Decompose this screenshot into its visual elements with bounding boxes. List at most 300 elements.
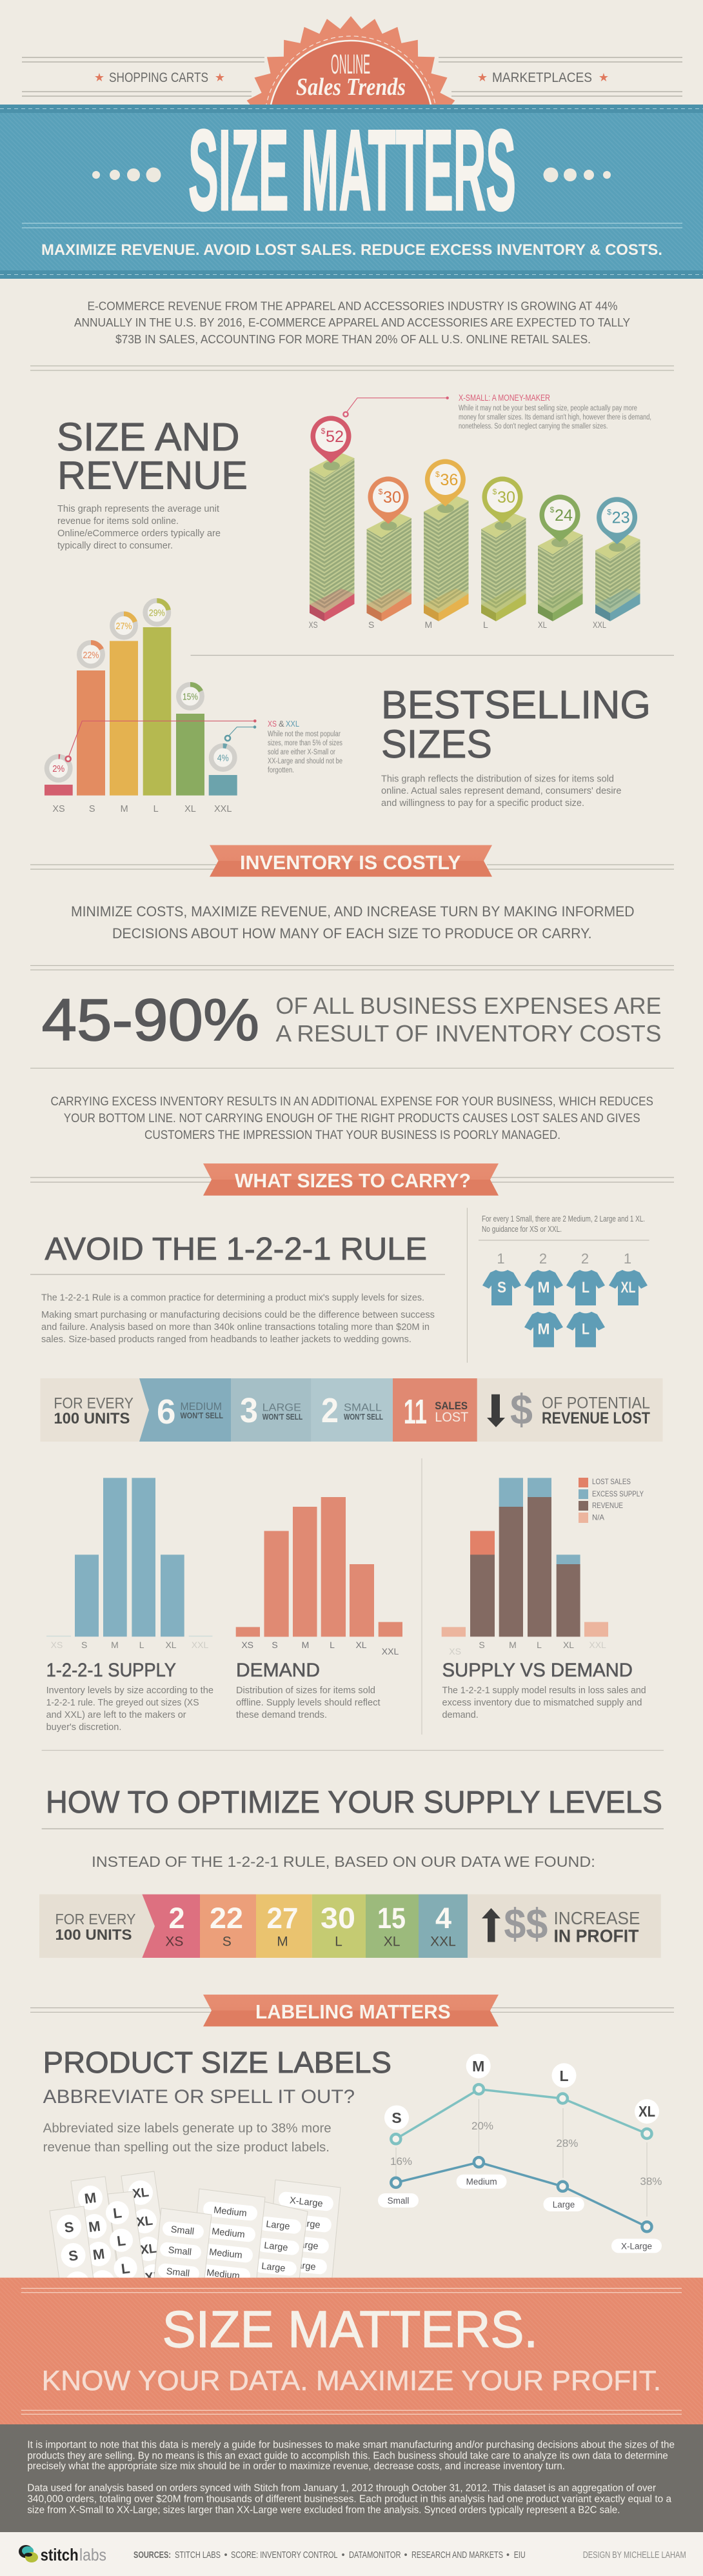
chart captions: demand: these demand trends. bbox=[236, 1710, 327, 1720]
chart: demand: M bbox=[302, 1640, 309, 1650]
sources: • bbox=[224, 2550, 228, 2561]
size names: XS bbox=[165, 1935, 183, 1949]
header tag: marketplaces: MARKETPLACES bbox=[492, 70, 592, 85]
ribbon: labeling matters: LABELING MATTERS bbox=[255, 2000, 451, 2023]
heading: bestselling sizes: SIZES bbox=[381, 722, 492, 766]
for every 100 units: FOR EVERY bbox=[54, 1395, 134, 1413]
size numbers: 22 bbox=[210, 1902, 243, 1935]
bestselling description: online. Actual sales represent demand, consumers' desire bbox=[381, 785, 622, 796]
callout: xs and xxl: XS bbox=[268, 719, 277, 729]
chart: demand bbox=[236, 1497, 402, 1656]
tag strip S: S bbox=[68, 2247, 79, 2264]
size names: XL bbox=[384, 1935, 400, 1949]
callout: x-small money maker: While it may not be your best selling size, people actually pay more bbox=[459, 405, 637, 412]
big stat: 45-90%: 45-90% bbox=[42, 987, 259, 1053]
illustration: abbreviated size tags bbox=[50, 2171, 170, 2296]
for every 100 units bbox=[55, 1911, 135, 1943]
chart: 1-2-2-1 supply: M bbox=[111, 1640, 119, 1650]
bar size labels: XL bbox=[184, 804, 196, 814]
closing banner bbox=[0, 2278, 703, 2424]
tag strip Medium: Medium bbox=[208, 2247, 243, 2261]
pin $24: 24 bbox=[555, 507, 573, 525]
pin $24: $ bbox=[550, 505, 555, 514]
chart: supply vs demand bbox=[442, 1477, 644, 1656]
disclaimer panel: It is important to note that this data is merely a guide for businesses to make smart manufacturing and/or purchasing decisions about the sizes of the bbox=[27, 2440, 675, 2451]
pin $24 bbox=[539, 495, 580, 542]
inventory intro text bbox=[71, 903, 635, 941]
11 sales lost: SALES bbox=[435, 1400, 468, 1412]
disclaimer panel: precisely what the appropriate size mix should be in order to maximize revenue, decrease costs, and increase inventory turn. bbox=[27, 2461, 565, 2472]
chart: bestselling sizes bars bbox=[45, 601, 237, 814]
potential revenue lost bbox=[542, 1394, 650, 1427]
tag strip Medium: Medium bbox=[213, 2205, 247, 2219]
legend bbox=[579, 1477, 644, 1523]
t-shirt size diagram: 1 bbox=[497, 1251, 505, 1267]
11 sales lost: LOST bbox=[435, 1410, 468, 1425]
disclaimer panel: size from X-Small to XX-Large; sizes larger than XX-Large were excluded from the analysis. Synced orders typically represent a B2C sale. bbox=[27, 2504, 620, 2515]
size axis labels: XL bbox=[538, 619, 547, 630]
3 large bbox=[240, 1391, 302, 1430]
chart: abbreviated vs spelled out revenue: Large bbox=[553, 2200, 575, 2209]
excess inventory paragraph: CARRYING EXCESS INVENTORY RESULTS IN AN ADDITIONAL EXPENSE FOR YOUR BUSINESS, WHICH REDUCES bbox=[50, 1095, 653, 1109]
heading: bestselling sizes: BESTSELLING bbox=[381, 683, 651, 727]
size numbers: 15 bbox=[377, 1902, 406, 1935]
chart: 1-2-2-1 supply: XL bbox=[165, 1640, 177, 1650]
bar size labels: S bbox=[89, 804, 95, 814]
bestselling description bbox=[381, 773, 622, 809]
tag strip L: L bbox=[112, 2204, 123, 2222]
chart captions: demand: offline. Supply levels should reflect bbox=[236, 1698, 381, 1708]
decorative dots left bbox=[92, 168, 161, 182]
bar size labels: XXL bbox=[214, 804, 232, 814]
tag strip M: M bbox=[83, 2189, 97, 2207]
pin $52 bbox=[311, 416, 351, 463]
tag strip L bbox=[106, 2191, 146, 2284]
header badge: online sales trends bbox=[244, 16, 457, 209]
big stat: 45-90%: A RESULT OF INVENTORY COSTS bbox=[276, 1020, 662, 1047]
callout: x-small money maker: money for smaller sizes. Its demand isn't high, however there is demand, bbox=[459, 414, 651, 421]
tag strip XL bbox=[121, 2171, 170, 2289]
tag strip XL: XL bbox=[144, 2269, 163, 2285]
heading: how to optimize: HOW TO OPTIMIZE YOUR SUPPLY LEVELS bbox=[46, 1786, 662, 1820]
sources: SOURCES: bbox=[134, 2550, 171, 2561]
rule description: sales. Size-based products ranged from headbands to leather jackets to wedding gowns. bbox=[41, 1334, 411, 1345]
chart: demand: S bbox=[272, 1640, 278, 1650]
ring XS 2%: 2% bbox=[52, 763, 64, 774]
rule description: and failure. Analysis based on more than 340k online transactions totaling more than $20M in bbox=[41, 1322, 430, 1333]
heading: size and revenue: SIZE AND bbox=[57, 415, 240, 459]
pin $36: $ bbox=[435, 470, 440, 479]
callout: x-small money maker bbox=[343, 393, 651, 430]
sources: • bbox=[506, 2550, 510, 2561]
shirt M second row: M bbox=[538, 1321, 550, 1338]
chart captions: supply vs demand: SUPPLY VS DEMAND bbox=[442, 1660, 633, 1681]
dollar sign: $ bbox=[510, 1385, 533, 1433]
legend: EXCESS SUPPLY bbox=[592, 1489, 644, 1498]
callout: x-small money maker: X-SMALL: A MONEY-MAKER bbox=[459, 393, 550, 403]
size and revenue description bbox=[57, 503, 221, 551]
size names bbox=[165, 1935, 456, 1949]
shirt XL: XL bbox=[620, 1279, 636, 1296]
shirt S bbox=[482, 1270, 521, 1305]
stitch labs logo bbox=[19, 2545, 106, 2564]
pin $30 S bbox=[368, 477, 409, 524]
chart captions: 1-2-2-1 supply: and XXL) are left to the makers or bbox=[46, 1710, 186, 1720]
optimize subheading: INSTEAD OF THE 1-2-2-1 RULE, BASED ON OUR DATA WE FOUND: bbox=[92, 1853, 595, 1870]
callout: xs and xxl: XXL bbox=[286, 719, 299, 729]
excess inventory paragraph: CUSTOMERS THE IMPRESSION THAT YOUR BUSINESS IS POORLY MANAGED. bbox=[144, 1129, 560, 1142]
chart: money stacks by size bbox=[309, 416, 640, 630]
chart: abbreviated vs spelled out revenue: M bbox=[472, 2058, 484, 2075]
pin $30 L: 30 bbox=[497, 488, 515, 507]
tag strip X-Large bbox=[266, 2180, 341, 2284]
tag strip Large: Large bbox=[264, 2240, 288, 2253]
tag strip Medium bbox=[190, 2189, 265, 2284]
shirt L second row: L bbox=[582, 1321, 589, 1338]
legend: LOST SALES bbox=[592, 1477, 631, 1486]
size axis labels: S bbox=[368, 619, 374, 630]
labels description bbox=[43, 2122, 332, 2155]
tag strip Medium: Medium bbox=[211, 2226, 245, 2240]
intro paragraph: $73B IN SALES, ACCOUNTING FOR MORE THAN 20% OF ALL U.S. ONLINE RETAIL SALES. bbox=[115, 333, 591, 346]
tag strip Small: Small bbox=[170, 2224, 195, 2237]
size numbers: 2 bbox=[168, 1902, 185, 1935]
chart: supply vs demand: XL bbox=[563, 1640, 574, 1650]
ring M 27%: 27% bbox=[116, 621, 132, 632]
callout: xs and xxl: sold are either X-Small or bbox=[268, 749, 335, 756]
chart: supply vs demand: XXL bbox=[589, 1640, 606, 1650]
rule description bbox=[41, 1293, 435, 1345]
chart captions: supply vs demand: demand. bbox=[442, 1710, 479, 1720]
legend: N/A bbox=[592, 1513, 604, 1522]
size axis labels bbox=[309, 619, 606, 630]
stack L bbox=[481, 514, 526, 621]
chart: 1-2-2-1 supply: XS bbox=[51, 1640, 63, 1650]
intro paragraph: E-COMMERCE REVENUE FROM THE APPAREL AND ACCESSORIES INDUSTRY IS GROWING AT 44% bbox=[88, 299, 618, 312]
disclaimer panel: products they are selling. By no means is this an exact guide to accomplish this. Each business should take care to analyze its own data to determine bbox=[27, 2451, 668, 2462]
chart: supply vs demand: L bbox=[537, 1640, 542, 1650]
callout: xs and xxl: XX-Large and should not be bbox=[268, 758, 342, 765]
stitch labs logo: labs bbox=[79, 2545, 106, 2564]
intro paragraph bbox=[74, 299, 630, 346]
6 medium: 6 bbox=[157, 1393, 175, 1431]
tag strip L: L bbox=[116, 2232, 126, 2249]
header tag: marketplaces: ★ bbox=[477, 71, 488, 84]
for every 100 units bbox=[54, 1395, 134, 1427]
pin $30 L bbox=[482, 477, 522, 524]
chart captions: demand: Distribution of sizes for items sold bbox=[236, 1685, 375, 1696]
chart: 1-2-2-1 supply: L bbox=[139, 1640, 144, 1650]
footer bbox=[0, 2532, 703, 2576]
chart: demand: L bbox=[330, 1640, 335, 1650]
chart: demand: XS bbox=[241, 1640, 253, 1650]
for every 100 units: 100 UNITS bbox=[54, 1410, 130, 1427]
6 medium: MEDIUM bbox=[181, 1400, 222, 1413]
chart captions: supply vs demand bbox=[442, 1660, 646, 1720]
stack M bbox=[424, 496, 468, 621]
spelled out pills bbox=[378, 2175, 662, 2253]
bar size labels: L bbox=[153, 804, 159, 814]
heading: product size labels: PRODUCT SIZE LABELS bbox=[43, 2046, 391, 2079]
ring XL 15% bbox=[179, 685, 202, 708]
sources: EIU bbox=[514, 2550, 526, 2561]
ring S 22% bbox=[79, 643, 103, 666]
sources bbox=[134, 2550, 526, 2561]
tag strip Medium: Medium bbox=[206, 2268, 240, 2282]
pin $23: $ bbox=[607, 508, 611, 517]
chart: supply vs demand: S bbox=[479, 1640, 485, 1650]
disclaimer panel bbox=[0, 2424, 703, 2532]
tag strip XL: XL bbox=[132, 2186, 150, 2201]
pin $30 S: $ bbox=[379, 487, 383, 496]
pin $36 bbox=[425, 459, 466, 507]
lift percentages: 28% bbox=[556, 2137, 578, 2149]
shirt L second row bbox=[566, 1312, 605, 1347]
t-shirt size diagram bbox=[482, 1251, 648, 1347]
pin $36: 36 bbox=[440, 471, 458, 489]
big stat: 45-90%: OF ALL BUSINESS EXPENSES ARE bbox=[276, 992, 662, 1019]
6 medium bbox=[157, 1393, 223, 1431]
header tag: shopping carts: SHOPPING CARTS bbox=[109, 70, 208, 85]
bestselling description: This graph reflects the distribution of sizes for items sold bbox=[381, 773, 614, 785]
ribbon: inventory is costly bbox=[210, 845, 492, 877]
abbreviated points bbox=[391, 2084, 651, 2144]
bar size labels: M bbox=[121, 804, 128, 814]
heading: product size labels bbox=[43, 2046, 391, 2108]
3 large: 3 bbox=[240, 1391, 258, 1430]
ring XXL 4%: 4% bbox=[217, 752, 229, 764]
chart: demand: XL bbox=[355, 1640, 367, 1650]
rule description: The 1-2-2-1 Rule is a common practice for determining a product mix's supply levels for sizes. bbox=[41, 1293, 424, 1303]
bestselling description: and willingness to pay for a specific product size. bbox=[381, 798, 584, 809]
callout: xs and xxl: While not the most popular bbox=[268, 730, 341, 738]
tag strip Large: Large bbox=[261, 2261, 286, 2274]
sources: • bbox=[341, 2550, 345, 2561]
shirt M bbox=[524, 1270, 563, 1305]
increase in profit: INCREASE bbox=[553, 1908, 640, 1928]
dollar signs: $$ bbox=[504, 1900, 548, 1947]
tag strip M: M bbox=[92, 2246, 106, 2263]
size axis labels: M bbox=[424, 619, 432, 630]
sources: STITCH LABS bbox=[175, 2550, 221, 2561]
ribbon: labeling matters bbox=[203, 1995, 499, 2026]
t-shirt size diagram: 2 bbox=[539, 1251, 547, 1267]
excess inventory paragraph: YOUR BOTTOM LINE. NOT CARRYING ENOUGH OF THE RIGHT PRODUCTS CAUSES LOST SALES AND GIVES bbox=[64, 1112, 640, 1125]
sources: DATAMONITOR bbox=[349, 2550, 401, 2561]
size names: L bbox=[335, 1935, 342, 1949]
pin $23: 23 bbox=[612, 509, 630, 527]
shirt M second row bbox=[524, 1312, 563, 1347]
ribbon: what sizes to carry bbox=[203, 1163, 499, 1196]
sources: • bbox=[404, 2550, 408, 2561]
inventory intro text: MINIMIZE COSTS, MAXIMIZE REVENUE, AND INCREASE TURN BY MAKING INFORMED bbox=[71, 903, 635, 920]
header badge: online sales trends: Sales Trends bbox=[296, 74, 406, 101]
decorative dots right bbox=[543, 168, 611, 182]
closing title: SIZE MATTERS. bbox=[163, 2300, 538, 2358]
labels description: Abbreviated size labels generate up to 38% more bbox=[43, 2122, 332, 2136]
tag strip Small bbox=[153, 2208, 212, 2284]
chart: 1-2-2-1 supply bbox=[46, 1478, 213, 1650]
chart captions: supply vs demand: excess inventory due to mismatched supply and bbox=[442, 1698, 642, 1708]
11 sales lost bbox=[404, 1393, 468, 1431]
optimal mix bar bbox=[39, 1895, 661, 1958]
closing tagline: KNOW YOUR DATA. MAXIMIZE YOUR PROFIT. bbox=[42, 2365, 661, 2397]
shirt L bbox=[566, 1270, 605, 1305]
3 large: LARGE bbox=[262, 1402, 301, 1414]
big stat: 45-90% bbox=[42, 987, 662, 1053]
chart captions: 1-2-2-1 supply: 1-2-2-1 SUPPLY bbox=[46, 1660, 176, 1681]
chart captions: 1-2-2-1 supply: buyer's discretion. bbox=[46, 1722, 121, 1733]
subtitle: MAXIMIZE REVENUE. AVOID LOST SALES. REDUCE EXCESS INVENTORY & COSTS. bbox=[41, 241, 662, 259]
chart: abbreviated vs spelled out revenue: X-Large bbox=[621, 2242, 652, 2251]
callout: xs and xxl: sizes, more than 5% of sizes bbox=[268, 740, 342, 747]
increase in profit: IN PROFIT bbox=[553, 1926, 639, 1946]
disclaimer panel: 340,000 orders, totaling over $20M from thousands of different businesses. Each product in this analysis had one product variant exactly equal to a bbox=[27, 2494, 671, 2505]
ring XXL 4% bbox=[212, 746, 235, 769]
ring XS 2% bbox=[46, 756, 70, 780]
for every 100 units: 100 UNITS bbox=[55, 1926, 132, 1943]
tag strip S: S bbox=[63, 2219, 75, 2236]
tag strip Large bbox=[253, 2202, 308, 2284]
pin $30 L: $ bbox=[493, 487, 497, 496]
pin $52: 52 bbox=[326, 428, 344, 446]
tag strip M bbox=[71, 2177, 119, 2295]
title banner bbox=[0, 105, 703, 279]
header tag: marketplaces: ★ bbox=[599, 71, 609, 84]
rule note bbox=[482, 1214, 645, 1234]
shirt XL bbox=[609, 1270, 648, 1305]
size and revenue description: This graph represents the average unit bbox=[57, 503, 220, 514]
chart captions: demand bbox=[236, 1660, 381, 1720]
pin $52: $ bbox=[321, 427, 326, 436]
size numbers bbox=[168, 1902, 451, 1935]
pin $30 S: 30 bbox=[383, 488, 401, 507]
size numbers: 30 bbox=[321, 1902, 355, 1935]
lift percentages bbox=[390, 2120, 662, 2188]
rule description: Making smart purchasing or manufacturing decisions could be the difference between success bbox=[41, 1310, 435, 1320]
tag strip S bbox=[50, 2206, 94, 2296]
chart captions: 1-2-2-1 supply bbox=[46, 1660, 213, 1733]
tag strip X-Large: X-Large bbox=[282, 2259, 316, 2273]
chart: 1-2-2-1 supply: XXL bbox=[192, 1640, 208, 1650]
tag strip M: M bbox=[88, 2218, 101, 2235]
callout: xs and xxl: & bbox=[279, 719, 284, 729]
size and revenue description: Online/eCommerce orders typically are bbox=[57, 528, 221, 539]
size numbers: 4 bbox=[435, 1902, 451, 1935]
rule note: No guidance for XS or XXL. bbox=[482, 1225, 562, 1234]
stack XS bbox=[310, 449, 355, 621]
chart: abbreviated vs spelled out revenue: L bbox=[559, 2068, 569, 2084]
size names: XXL bbox=[430, 1935, 456, 1949]
lift percentages: 38% bbox=[640, 2175, 662, 2188]
tag strip X-Large: X-Large bbox=[284, 2238, 319, 2252]
size names: M bbox=[277, 1935, 288, 1949]
header tag: shopping carts: ★ bbox=[94, 71, 104, 84]
size axis labels: XXL bbox=[593, 619, 606, 630]
2 small: 2 bbox=[321, 1391, 339, 1430]
2 small bbox=[321, 1391, 383, 1430]
stack XL bbox=[538, 530, 583, 621]
size axis labels: XS bbox=[309, 619, 318, 630]
shirt S: S bbox=[497, 1279, 506, 1296]
labels description: revenue than spelling out the size product labels. bbox=[43, 2140, 330, 2155]
bar size labels bbox=[52, 804, 232, 814]
size and revenue description: typically direct to consumer. bbox=[57, 540, 173, 551]
chart: supply vs demand: XS bbox=[449, 1646, 461, 1656]
size and revenue description: revenue for items sold online. bbox=[57, 516, 179, 527]
potential revenue lost: REVENUE LOST bbox=[542, 1409, 650, 1427]
shirt M: M bbox=[538, 1279, 550, 1296]
chart captions: supply vs demand: The 1-2-2-1 supply model results in loss sales and bbox=[442, 1685, 646, 1696]
callout: x-small money maker: nonetheless. So don't neglect carrying the smaller sizes. bbox=[459, 423, 608, 430]
tag strip Small: Small bbox=[168, 2245, 192, 2258]
bar size labels: XS bbox=[52, 804, 65, 814]
tag strip Large: Large bbox=[266, 2219, 290, 2232]
size names: S bbox=[223, 1935, 232, 1949]
increase in profit bbox=[553, 1908, 640, 1946]
size numbers: 27 bbox=[267, 1902, 298, 1935]
tag strip L: L bbox=[120, 2260, 131, 2277]
chart: abbreviated vs spelled out revenue: XL bbox=[639, 2103, 655, 2120]
tag strip X-Large: X-Large bbox=[286, 2217, 321, 2231]
excess inventory paragraph bbox=[50, 1095, 653, 1142]
2 small: WON'T SELL bbox=[344, 1413, 383, 1422]
loss summary bar bbox=[40, 1378, 663, 1442]
shirt L: L bbox=[582, 1279, 589, 1296]
chart: abbreviated vs spelled out revenue bbox=[378, 2054, 662, 2253]
tag strip XL: XL bbox=[135, 2214, 153, 2229]
illustration: spelled-out size tags bbox=[153, 2180, 341, 2284]
chart captions: 1-2-2-1 supply: Inventory levels by size according to the bbox=[46, 1685, 213, 1696]
potential revenue lost: OF POTENTIAL bbox=[542, 1394, 650, 1413]
chart captions: demand: DEMAND bbox=[236, 1660, 320, 1681]
heading: size and revenue bbox=[57, 415, 248, 497]
chart: abbreviated vs spelled out revenue: Small bbox=[388, 2196, 409, 2206]
chart: abbreviated vs spelled out revenue: S bbox=[391, 2109, 402, 2126]
inventory intro text: DECISIONS ABOUT HOW MANY OF EACH SIZE TO PRODUCE OR CARRY. bbox=[112, 925, 592, 941]
heading: product size labels: ABBREVIATE OR SPELL IT OUT? bbox=[43, 2086, 355, 2108]
intro paragraph: ANNUALLY IN THE U.S. BY 2016, E-COMMERCE APPAREL AND ACCESSORIES ARE EXPECTED TO TALLY bbox=[74, 316, 630, 329]
stitch labs logo: stitch bbox=[41, 2545, 79, 2564]
ring S 22%: 22% bbox=[83, 650, 99, 661]
chart: supply vs demand: M bbox=[509, 1640, 517, 1650]
6 medium: WON'T SELL bbox=[181, 1411, 223, 1420]
header tag: shopping carts: ★ bbox=[215, 71, 225, 84]
ring L 29% bbox=[145, 601, 169, 624]
3 large: WON'T SELL bbox=[262, 1413, 302, 1422]
lift percentages: 20% bbox=[471, 2120, 493, 2132]
ribbon: what sizes to carry: WHAT SIZES TO CARRY? bbox=[235, 1169, 471, 1192]
lift percentages: 16% bbox=[390, 2155, 412, 2168]
stack S bbox=[366, 514, 411, 621]
chart: demand: XXL bbox=[382, 1646, 399, 1656]
arrow down bbox=[487, 1394, 505, 1427]
ring XL 15%: 15% bbox=[183, 692, 198, 702]
rule note: For every 1 Small, there are 2 Medium, 2 Large and 1 XL. bbox=[482, 1214, 645, 1223]
11 sales lost: 11 bbox=[404, 1393, 427, 1431]
callout: xs and xxl bbox=[66, 719, 342, 774]
ring L 29%: 29% bbox=[149, 608, 165, 618]
disclaimer panel: Data used for analysis based on orders synced with Stitch from January 1, 2012 through October 31, 2012. This dataset is an aggregation of over bbox=[27, 2482, 656, 2493]
t-shirt size diagram: 1 bbox=[624, 1251, 631, 1267]
abbreviated bubbles bbox=[384, 2054, 659, 2130]
callout: xs and xxl: forgotten. bbox=[268, 767, 294, 774]
heading: avoid the 1-2-2-1 rule: AVOID THE 1-2-2-1 RULE bbox=[45, 1232, 427, 1267]
tag strip XL: XL bbox=[139, 2242, 157, 2257]
2 small: SMALL bbox=[344, 1402, 382, 1414]
header badge: online sales trends: ONLINE bbox=[331, 49, 370, 80]
for every 100 units: FOR EVERY bbox=[55, 1911, 135, 1927]
